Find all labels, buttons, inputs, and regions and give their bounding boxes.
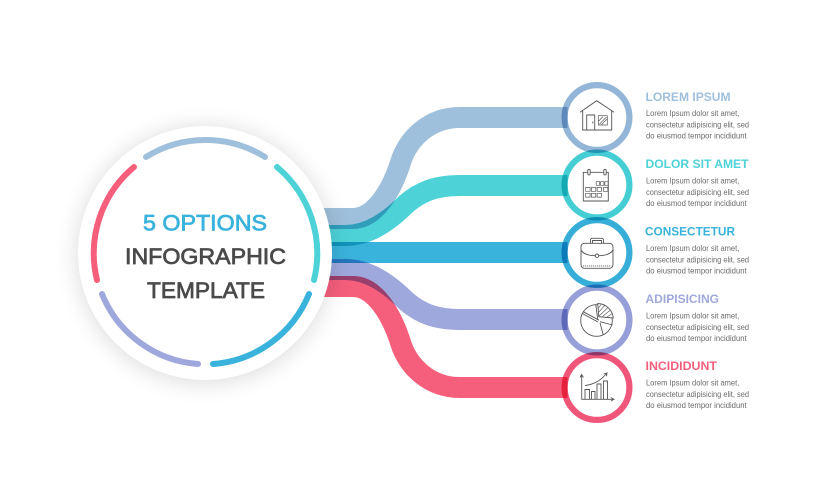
- ring: option 5: [565, 355, 629, 420]
- text: option 2: [646, 159, 749, 208]
- ribbon: option 5: [320, 286, 568, 388]
- body: [646, 109, 749, 140]
- icon discs: [568, 88, 626, 417]
- body: Lorem Ipsum dolor sit amet,: [646, 312, 739, 320]
- body: [646, 176, 749, 208]
- rings: [565, 85, 629, 420]
- body: [646, 312, 749, 343]
- body: consectetur adipisicing elit, sed: [646, 255, 749, 264]
- body: do eiusmod tempor incididunt: [646, 132, 747, 140]
- ring: option 2: [565, 153, 629, 217]
- text: option 5: [646, 361, 749, 410]
- body: consectetur adipisicing elit, sed: [646, 390, 749, 399]
- heading: ADIPISICING: [646, 294, 719, 306]
- heading: LOREM IPSUM: [646, 92, 730, 104]
- ring: option 1: [565, 85, 629, 150]
- body: [646, 244, 749, 276]
- body: do eiusmod tempor incididunt: [646, 401, 747, 410]
- icon: pie chart: [581, 304, 613, 336]
- ribbon: option 4: [320, 270, 568, 320]
- ring: option 3: [565, 220, 629, 285]
- body: Lorem Ipsum dolor sit amet,: [646, 378, 739, 388]
- heading: INCIDIDUNT: [646, 361, 717, 373]
- connector ribbons: [320, 118, 568, 388]
- icon: house: [580, 101, 614, 130]
- title: [125, 210, 286, 303]
- central circle: [78, 126, 332, 382]
- text: option 4: [646, 294, 749, 343]
- body: [646, 378, 749, 410]
- circle disc: [78, 126, 332, 380]
- ribbon: option 1: [320, 118, 568, 218]
- heading: CONSECTETUR: [645, 226, 736, 238]
- ribbon: option 2: [320, 186, 568, 236]
- title line 3: TEMPLATE: [147, 278, 265, 303]
- segmented ring: [94, 140, 317, 364]
- arc: light blue: [146, 140, 265, 157]
- icon: calendar: [583, 169, 608, 201]
- body: Lorem Ipsum dolor sit amet,: [646, 109, 739, 118]
- body: consectetur adipisicing elit, sed: [646, 323, 749, 332]
- body: consectetur adipisicing elit, sed: [646, 120, 749, 129]
- arc: periwinkle: [102, 294, 198, 364]
- body: Lorem Ipsum dolor sit amet,: [646, 244, 739, 253]
- text: option 3: [645, 226, 749, 276]
- ribbon: option 3: [320, 242, 568, 263]
- body: do eiusmod tempor incididunt: [646, 334, 747, 343]
- body: do eiusmod tempor incididunt: [646, 199, 747, 208]
- title line 1: 5 OPTIONS: [143, 210, 267, 236]
- text: option 1: [646, 92, 749, 140]
- icon: growth chart: [580, 373, 614, 401]
- title line 2: INFOGRAPHIC: [125, 244, 286, 269]
- circle shadow: [78, 128, 332, 382]
- body: do eiusmod tempor incididunt: [646, 266, 747, 276]
- icon: briefcase: [581, 238, 613, 268]
- arc: blue: [213, 294, 309, 364]
- heading: DOLOR SIT AMET: [646, 159, 748, 171]
- arc: pink: [94, 167, 134, 280]
- body: consectetur adipisicing elit, sed: [646, 188, 749, 197]
- ring: option 4: [565, 288, 629, 352]
- arc: teal: [277, 167, 317, 280]
- body: Lorem Ipsum dolor sit amet,: [646, 176, 739, 186]
